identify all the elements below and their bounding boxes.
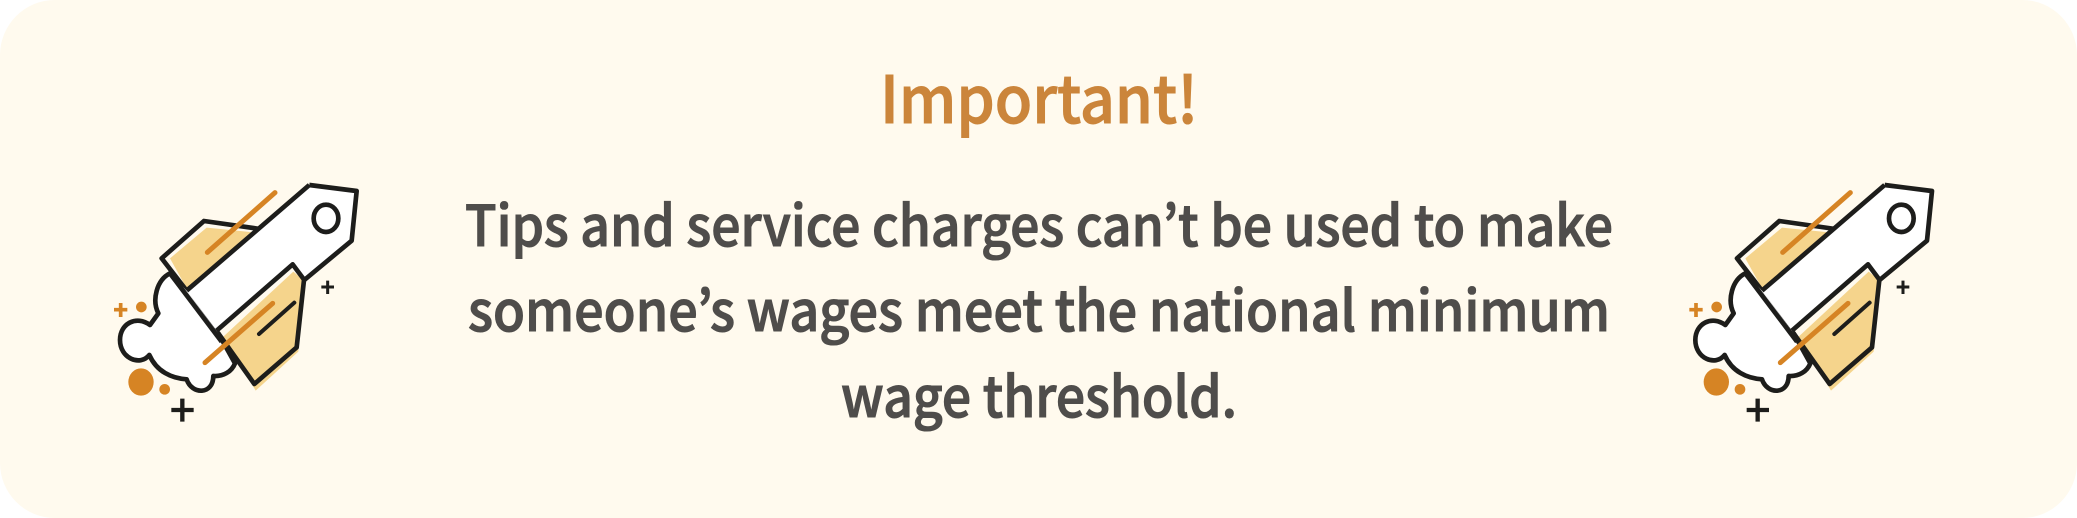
text block: body message	[465, 182, 1613, 434]
icon: left rocket	[114, 185, 357, 422]
title: Important!	[880, 48, 1198, 142]
icon: right rocket	[1689, 185, 1932, 422]
text block: body message: Tips and service charges can’t be used to make	[465, 182, 1613, 263]
text block: body message: someone’s wages meet the national minimum	[468, 267, 1610, 348]
text block: body message: wage threshold.	[841, 353, 1237, 434]
